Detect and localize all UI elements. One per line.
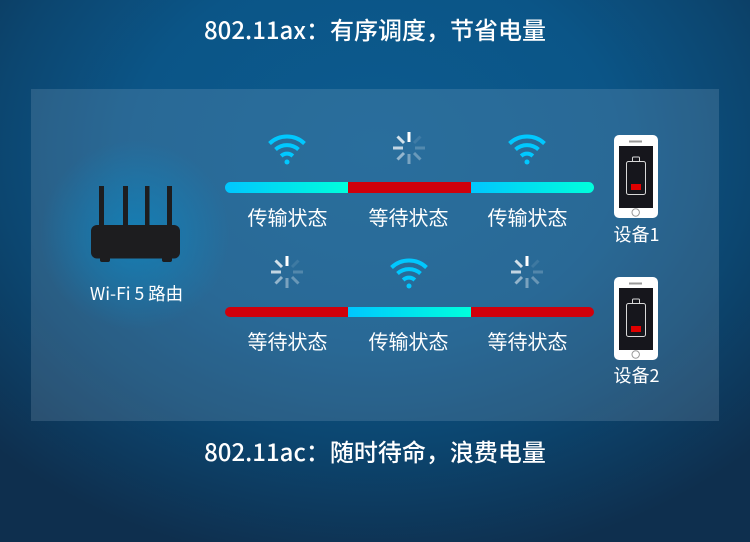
icon: wifi 3 (392, 261, 426, 288)
icon: spinner 2 (271, 256, 303, 288)
label: row 2 right: 等待状态 (488, 326, 568, 355)
router label: Wi-Fi 5 路由 (90, 281, 183, 306)
icon: wifi 1 (270, 137, 304, 164)
title: 802.11ac: 802.11ac：随时待命，浪费电量 (204, 433, 546, 468)
title: 802.11ax: 802.11ax：有序调度，节省电量 (204, 11, 546, 46)
label: row 2 left: 等待状态 (248, 326, 328, 355)
icon: wifi 2 (510, 137, 544, 164)
label: row 2 middle: 传输状态 (368, 326, 448, 355)
icon: phone 1 (614, 135, 658, 218)
icon: router (91, 186, 180, 262)
status bar: device 2 (225, 307, 594, 317)
label: row 1 right: 传输状态 (488, 202, 568, 231)
label: row 1 middle: 等待状态 (368, 202, 448, 231)
icon: phone 2 (614, 277, 658, 360)
label: device 2: 设备2 (614, 362, 660, 388)
router glow (40, 140, 230, 330)
status bar: device 1 (225, 182, 594, 193)
panel: comparison (31, 89, 719, 421)
label: device 1: 设备1 (614, 221, 660, 247)
icon: spinner 1 (393, 132, 425, 164)
icon: spinner 3 (511, 256, 543, 288)
label: row 1 left: 传输状态 (248, 202, 328, 231)
